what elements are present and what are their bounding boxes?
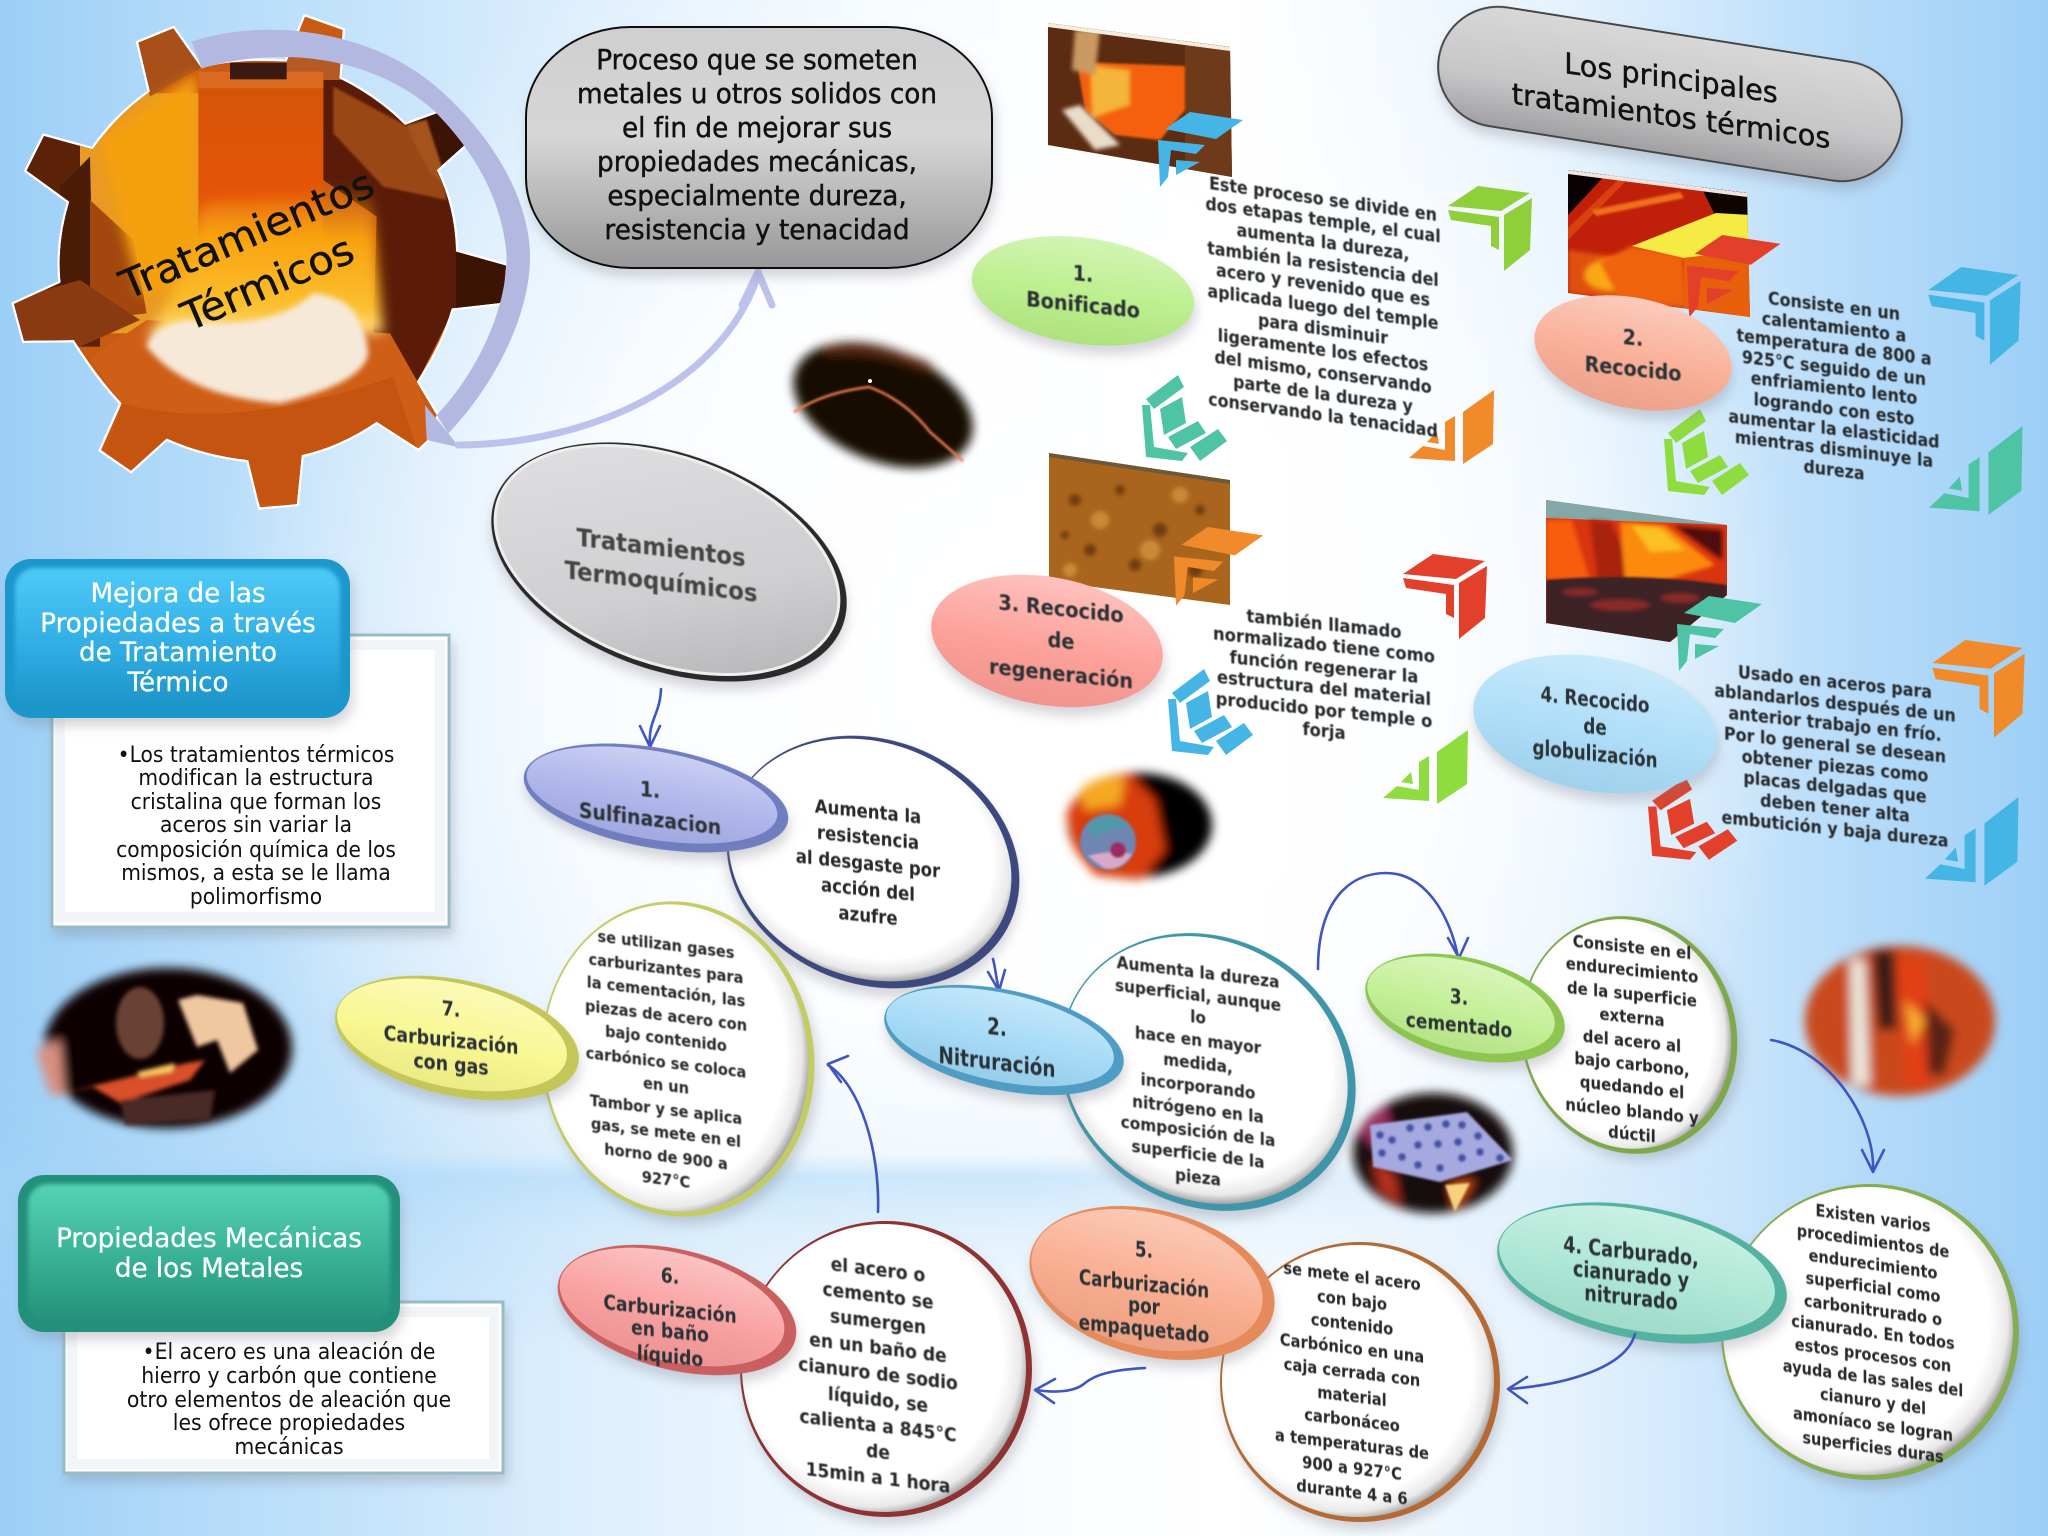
panel: Mejora de las propiedades [5,559,449,927]
bano liquido description: líquido, se [828,1383,928,1417]
mejora body text: composición química de los [116,836,396,862]
nitruracion label text: Nitruración [938,1042,1056,1083]
con gas label text [384,992,518,1083]
bubble: empaquetado circle [1220,1242,1500,1522]
mejora heading box [5,559,350,718]
arrow from gear to definition box [458,272,772,445]
propiedades body text: mecánicas [234,1434,344,1460]
empaquetado description: a temperaturas de [1275,1425,1429,1464]
mejora heading text: Mejora de las [90,578,266,609]
cementado description [1565,930,1699,1151]
photo: rust texture [1049,453,1230,608]
label: Carburado [1485,1180,1799,1366]
bubble: carburizacion con gas circle [521,884,835,1234]
nitruracion description: superficie de la [1132,1136,1264,1172]
text: recocido description: enfriamiento lento [1751,368,1917,410]
bano liquido label text: líquido [637,1342,703,1372]
carburado description: endurecimiento [1809,1245,1937,1283]
carburado description: cianurado. En todos [1791,1310,1955,1354]
text: bonificado description: ligeramente los efectos [1218,325,1428,376]
photo: orange machine [1805,946,1995,1096]
carburado label text: 4. Carburado, [1563,1231,1699,1272]
label: Nitruracion [874,966,1134,1114]
con gas description [585,925,747,1199]
sulfinazacion description [796,793,940,935]
nitruracion description: Aumenta la dureza [1117,952,1279,992]
text: bonificado description: acero y revenido que es [1216,260,1430,311]
definition text [577,44,937,246]
definition text: propiedades mecánicas, [597,146,917,178]
text: bonificado description [1205,173,1441,443]
arrow: carburado to empaquetado [1508,1334,1635,1403]
con gas description: se utilizan gases [598,927,734,963]
bubble: bano liquido circle [740,1221,1032,1517]
text: globulizacion description: Usado en aceros para [1738,662,1932,703]
nitruracion description: composición de la [1121,1112,1275,1151]
bano liquido description: de [866,1440,890,1465]
carburado description: superficial como [1806,1267,1941,1307]
empaquetado description: 900 a 927°C [1302,1452,1402,1484]
gear title: Tratamientos [112,160,381,309]
empaquetado description: contenido [1311,1309,1393,1339]
bubble 1 Bonificado [965,223,1201,359]
text: globulizacion description: anterior trabajo en frío. [1728,703,1942,746]
text: bonificado description: también la resistencia del [1207,238,1439,292]
text: recocido description: calentamiento a [1762,308,1906,347]
sulfinazacion label text [579,768,721,840]
definition text: especialmente dureza, [607,180,907,212]
bubble 3 label: 3. Recocido [998,590,1124,628]
bano liquido label text: en baño [631,1317,709,1347]
con gas label text: Carburización [384,1023,518,1059]
empaquetado label text: Carburización [1079,1265,1209,1303]
cementado description: Consiste en el [1573,931,1691,963]
con gas label text: con gas [413,1050,489,1080]
bano liquido description: sumergen [830,1305,926,1339]
photo: furnace 1 [1048,20,1234,180]
carburado description: cianuro y del [1820,1383,1926,1419]
curved arrow around gear [192,30,530,447]
empaquetado description: carbonáceo [1304,1404,1400,1436]
carburado description: Existen varios [1815,1200,1931,1236]
sulfinazacion description: al desgaste por [796,845,940,883]
text: regeneracion description: producido por temple o [1216,689,1432,733]
bubble 1 label [1026,255,1140,323]
con gas description: en un [643,1074,689,1098]
sulfinazacion description: resistencia [817,822,919,855]
mejora body text [116,741,396,909]
arrow: bano liquido to carburizacion con gas [828,1056,878,1212]
empaquetado label text: 5. [1135,1237,1153,1263]
con gas description: bajo contenido [605,1022,727,1056]
bano liquido description [798,1249,958,1499]
bano liquido description: en un baño de [809,1329,947,1368]
bubble 3 Recocido de regeneracion [921,558,1173,724]
cementado description: núcleo blando y [1565,1094,1699,1128]
nitruracion description: nitrógeno en la [1132,1091,1264,1127]
gear title [112,160,402,358]
bubble: nitruracion circle [1008,878,1408,1266]
cementado description: externa [1599,1004,1665,1031]
mejora white panel [52,635,449,927]
sulfinazacion label text: 1. [640,776,660,803]
text: bonificado description: dos etapas temple, el cual [1205,194,1441,248]
text: globulizacion description: embutición y baja dureza [1722,807,1948,852]
text: bonificado description: aumenta la dureza, [1237,220,1409,265]
definition text: Proceso que se someten [596,44,918,76]
text: bonificado description: para disminuir [1258,310,1389,349]
oval: Tratamientos Termoquimicos [458,397,880,727]
text: regeneracion description: estructura del material [1217,667,1431,710]
propiedades body text: otro elementos de aleación que [127,1387,451,1413]
mejora body text: aceros sin variar la [160,811,352,837]
cementado description: dúctil [1608,1122,1656,1147]
nitruracion description: hace en mayor [1135,1023,1261,1058]
text: recocido description: aumentar la elasticidad [1728,406,1940,453]
carburado description: ayuda de las sales del [1783,1355,1963,1401]
bano liquido label text: Carburización [603,1292,737,1328]
text: recocido description [1728,283,1940,494]
propiedades body text [127,1339,451,1460]
propiedades heading box [18,1175,400,1332]
mejora heading text [40,578,316,698]
propiedades body text: hierro y carbón que contiene [141,1363,437,1389]
carburado description [1783,1195,1963,1470]
empaquetado description: se mete el acero [1283,1258,1421,1295]
label: Carburizacion con gas [324,955,590,1121]
photo: blue lattice [1353,1093,1513,1213]
photo: furnace 2 [1568,170,1750,317]
icons: section 1 [1142,112,1532,464]
con gas description: la cementación, las [587,973,745,1011]
con gas description: 927°C [642,1167,690,1192]
text: recocido description: mientras disminuye la [1735,427,1933,472]
sulfinazacion description: azufre [838,902,898,930]
text: bonificado description: Este proceso se divide en [1209,173,1437,226]
text: bonificado description: parte de la dureza y [1233,372,1413,418]
panel: principal treatments pill [1429,0,1911,190]
arrow: sulfinazacion to nitruracion [988,959,1005,991]
photo: forge worker [36,968,292,1128]
empaquetado label text: por [1128,1293,1160,1320]
bano liquido label text [603,1259,737,1375]
bubble 1 label: Bonificado [1026,286,1140,323]
text: regeneracion description [1213,603,1435,754]
text: bonificado description: aplicada luego del temple [1208,281,1438,335]
carburado description: carbonitrurado o [1804,1290,1942,1330]
photo: flames [1546,500,1728,645]
nitruracion description: pieza [1175,1164,1221,1190]
bano liquido description: el acero o [831,1253,925,1287]
con gas description: gas, se mete en el [591,1114,741,1151]
empaquetado description: Carbónico en una [1280,1329,1424,1367]
sulfinazacion label text: Sulfinazacion [579,797,721,840]
mejora body text: •Los tratamientos térmicos [118,741,394,767]
mejora body text: mismos, a esta se le llama [121,859,391,885]
bubble: resistance circle [688,693,1058,1031]
arrow: nitruracion to cementado [1318,873,1468,969]
mejora heading text: Propiedades a través [40,608,316,639]
definition text: resistencia y tenacidad [604,214,910,246]
termoquimicos label: Termoquímicos [565,555,757,608]
carburado label text [1563,1231,1699,1318]
empaquetado description: caja cerrada con [1284,1354,1420,1391]
bubble 4 label: de [1583,714,1607,741]
cementado description: quedando el [1580,1072,1684,1103]
nitruracion description: lo [1190,1006,1206,1028]
empaquetado description: con bajo [1317,1286,1387,1315]
bubble 2 label: Recocido [1585,351,1681,386]
nitruracion label text [938,1007,1056,1083]
label: Sulfinazacion [515,725,797,871]
bano liquido description: cianuro de sodio [798,1353,958,1395]
carburado label text: cianurado y [1573,1255,1689,1294]
con gas description: carbónico se coloca [586,1044,746,1082]
propiedades heading text: Propiedades Mecánicas [56,1223,362,1254]
bubble: carburado circle [1721,1184,2019,1480]
nitruracion description: superficial, aunque [1115,975,1281,1015]
propiedades heading text [56,1223,362,1284]
nitruracion description: medida, [1163,1049,1233,1077]
photo: burning earth [1066,773,1212,880]
cementado label text: cementado [1406,1009,1512,1043]
bubble 4 label: globulización [1532,736,1658,773]
bubble 1 label: 1. [1073,260,1093,287]
text: recocido description: temperatura de 800 a [1736,325,1932,370]
text: bonificado description: conservando la tenacidad [1208,389,1438,442]
text: globulizacion description: Por lo general se desean [1724,723,1946,768]
empaquetado description: material [1317,1382,1387,1411]
text: globulizacion description: placas delgadas que [1743,768,1927,808]
empaquetado label text [1079,1231,1209,1348]
sulfinazacion description: acción del [821,874,915,906]
con gas description: carburizantes para [589,950,743,988]
carburado label text: nitrurado [1584,1279,1678,1315]
mejora body text: cristalina que forman los [131,788,381,814]
panel: Propiedades Mecanicas [18,1175,503,1473]
text: recocido description: dureza [1803,456,1865,485]
pill text: tratamientos térmicos [1512,77,1830,155]
nitruracion label text: 2. [987,1013,1007,1042]
gear title: Térmicos [174,226,361,341]
empaquetado description: durante 4 a 6 [1296,1475,1408,1509]
text: recocido description: 925°C seguido de un [1742,347,1926,391]
cementado description: de la superficie [1567,977,1697,1011]
bubble 4 Recocido de globulizacion [1462,637,1728,811]
termoquimicos label: Tratamientos [577,523,745,573]
bubble: cementado circle [1490,888,1768,1182]
earth globe [1080,814,1136,870]
cementado label text: 3. [1450,986,1468,1010]
nitruracion description [1115,952,1281,1197]
arrow: termoquimicos to sulfinazacion [640,689,661,747]
mejora body text: polimorfismo [190,883,322,909]
text: bonificado description: del mismo, conservando [1214,347,1432,399]
text: regeneracion description: normalizado tiene como [1213,624,1435,668]
bano liquido description: cemento se [823,1278,933,1314]
text: regeneracion description: función regenerar la [1230,647,1418,688]
con gas label text: 7. [442,998,460,1022]
pill text [1512,39,1830,155]
mejora heading text: Térmico [126,667,229,698]
mejora body text: modifican la estructura [138,764,374,790]
text: recocido description: Consiste en un [1768,288,1900,325]
con gas description: piezas de acero con [585,996,747,1035]
bano liquido description: calienta a 845°C [799,1406,957,1447]
con gas description: horno de 900 a [604,1140,728,1174]
text: regeneracion description: también llamado [1246,606,1402,643]
con gas description: Tambor y se aplica [590,1091,742,1129]
text: globulizacion description: obtener piezas como [1742,746,1928,787]
definition text: metales u otros solidos con [577,78,937,110]
cementado label text [1406,981,1512,1043]
bubble 2 label: 2. [1623,324,1643,351]
carburado description: superficies duras [1802,1427,1944,1467]
bubble 3 label [989,589,1133,694]
carburado description: amoníaco se logran [1793,1403,1953,1446]
definition text: el fin de mejorar sus [622,112,892,144]
icons: section 2 [1664,235,2022,515]
bubble 2 Recocido [1524,278,1742,428]
cementado description: bajo carbono, [1574,1048,1690,1080]
propiedades heading text: de los Metales [115,1253,303,1284]
text: globulizacion description [1714,659,1956,853]
arrow: empaquetado to bano liquido [1035,1368,1145,1403]
label: Carburizacion por empaquetado [1013,1182,1291,1384]
bano liquido description: 15min a 1 hora [806,1458,950,1498]
label: Carburizacion en bano liquido [544,1222,810,1398]
text: globulizacion description: ablandarlos después de un [1714,680,1956,727]
propiedades white panel [64,1302,503,1473]
carburado description: estos procesos con [1795,1334,1951,1376]
bubble 3 label: regeneración [989,654,1133,694]
photo: glowing wire [775,318,991,492]
bubble 4 label [1532,682,1658,773]
text: recocido description: logrando con esto [1754,389,1914,430]
empaquetado label text: empaquetado [1079,1310,1209,1348]
arrow: cementado to carburado [1771,1040,1884,1172]
sulfinazacion description: Aumenta la [815,795,921,829]
icons: section 3 [1168,527,1487,804]
text: globulizacion description: deben tener alta [1760,790,1910,827]
bubble 2 label [1585,320,1681,386]
label: cementado [1354,935,1576,1081]
pill text: Los principales [1564,46,1778,110]
termoquimicos label [565,521,757,608]
text: regeneracion description: forja [1302,719,1346,744]
empaquetado description [1275,1257,1429,1512]
propiedades body text: les ofrece propiedades [173,1410,405,1436]
gear with furnace image [0,0,520,520]
bubble 4 label: 4. Recocido [1541,683,1649,718]
bano liquido label text: 6. [661,1265,679,1289]
definition box [526,27,992,268]
mejora heading text: de Tratamiento [79,637,277,668]
icons: section 4 [1648,596,2025,886]
nitruracion description: incorporando [1141,1069,1255,1103]
carburado description: procedimientos de [1797,1220,1949,1262]
bubble 3 label: de [1048,627,1074,655]
cementado description: del acero al [1583,1026,1681,1056]
propiedades body text: •El acero es una aleación de [143,1339,435,1365]
cementado description: endurecimiento [1566,953,1698,987]
